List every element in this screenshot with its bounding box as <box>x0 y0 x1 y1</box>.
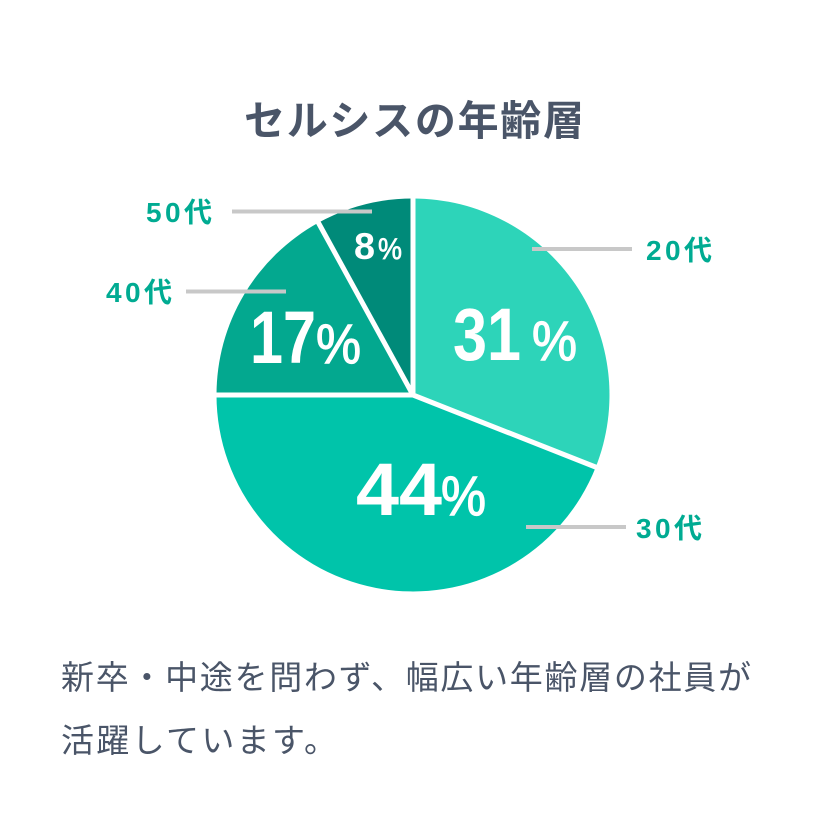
value: 44%: % <box>441 464 486 527</box>
slice: 30代 44% <box>216 395 596 591</box>
slice: 50代 8% <box>318 198 413 395</box>
value: 17%: % <box>316 312 361 375</box>
description text <box>61 659 751 759</box>
label: 30代: 30代 <box>636 513 702 544</box>
value: 31% <box>453 293 577 376</box>
value: 44%: 44 <box>356 448 442 531</box>
slice: 40代 17% <box>216 223 413 395</box>
value: 31%: % <box>532 309 577 372</box>
label: 50代: 50代 <box>146 197 212 228</box>
value: 44% <box>356 448 486 531</box>
description text: 新卒・中途を問わず、幅広い年齢層の社員が <box>61 659 751 696</box>
label: 20代: 20代 <box>646 235 712 266</box>
leader line: 30代 <box>526 525 626 529</box>
value: 8%: % <box>378 233 402 266</box>
label: 40代: 40代 <box>106 277 172 308</box>
leader line: 50代 <box>232 210 372 214</box>
value: 31%: 31 <box>453 293 521 376</box>
value: 17%: 17 <box>250 296 316 379</box>
description text: 活躍しています。 <box>61 722 337 759</box>
pie chart <box>213 195 609 591</box>
slice: 20代 31% <box>413 198 609 467</box>
title: セルシスの年齢層 <box>244 98 584 144</box>
leader line: 40代 <box>186 290 286 294</box>
value: 8%: 8 <box>354 226 375 267</box>
value: 8% <box>354 226 402 267</box>
leader line: 20代 <box>532 247 632 251</box>
